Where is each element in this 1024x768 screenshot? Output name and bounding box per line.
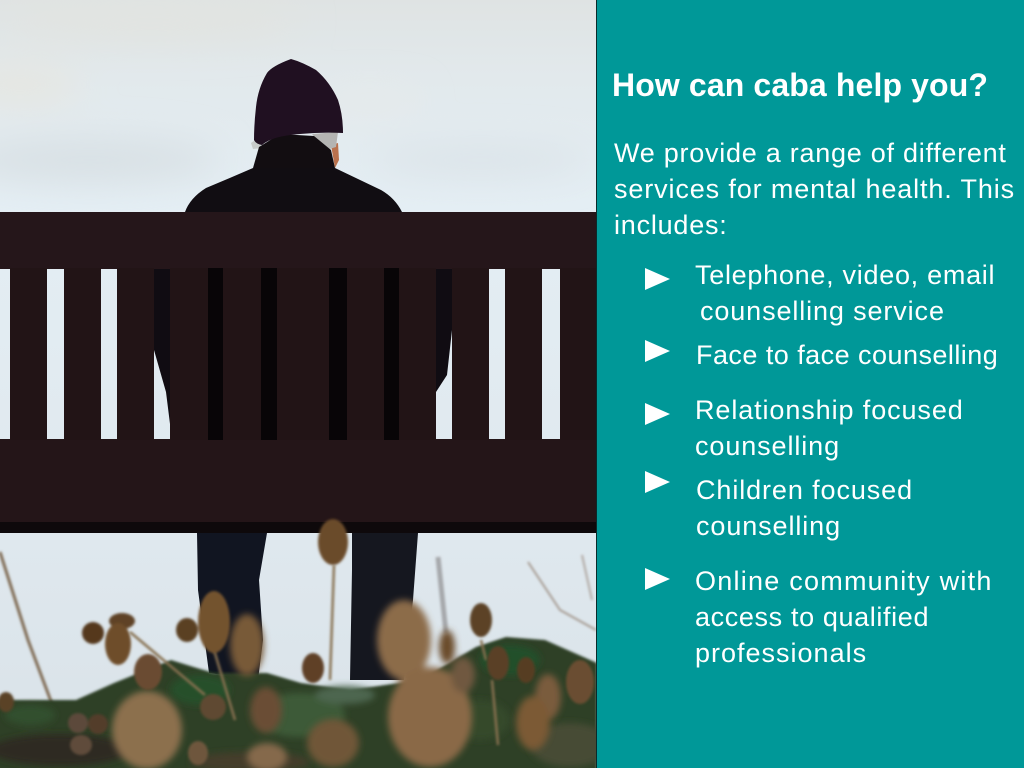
list item: relationship — [695, 395, 964, 461]
intro text: services for mental health. This — [614, 174, 1015, 204]
intro text: includes: — [614, 210, 728, 240]
photo: man on a bench seen from behind — [0, 0, 596, 768]
icon: arrow 4 — [645, 471, 670, 493]
list item: children — [696, 475, 913, 541]
icon: arrow 2 — [645, 340, 670, 362]
thin grasses — [0, 552, 596, 712]
intro text — [614, 138, 1015, 240]
list item: online community: professionals — [695, 638, 867, 668]
list item: relationship: counselling — [695, 431, 840, 461]
icon: arrow 3 — [645, 403, 670, 425]
list item: children: Children focused — [696, 475, 913, 505]
list item: telephone: counselling service — [700, 296, 945, 326]
list item: online community — [695, 566, 993, 668]
foliage — [0, 637, 610, 768]
bench — [0, 212, 597, 533]
intro text: We provide a range of different — [614, 138, 1007, 168]
man — [154, 59, 452, 680]
heading: How can caba help you? — [612, 67, 988, 103]
icon: arrow 5 — [645, 568, 670, 590]
teasel stems — [130, 565, 498, 745]
list item: relationship: Relationship focused — [695, 395, 964, 425]
clouds in the sky — [0, 2, 590, 182]
blurred foreground teasels — [112, 600, 561, 768]
sharper teasel heads — [0, 519, 594, 765]
list item: telephone: Telephone, video, email — [695, 260, 995, 290]
list item: online community: access to qualified — [695, 602, 929, 632]
list item: face to face: Face to face counselling — [696, 340, 998, 370]
list item: children: counselling — [696, 511, 841, 541]
list item: telephone — [695, 260, 995, 326]
panel: teal information panel — [596, 0, 1024, 768]
icon: arrow 1 — [645, 268, 670, 290]
list item: online community: Online community with — [695, 566, 993, 596]
